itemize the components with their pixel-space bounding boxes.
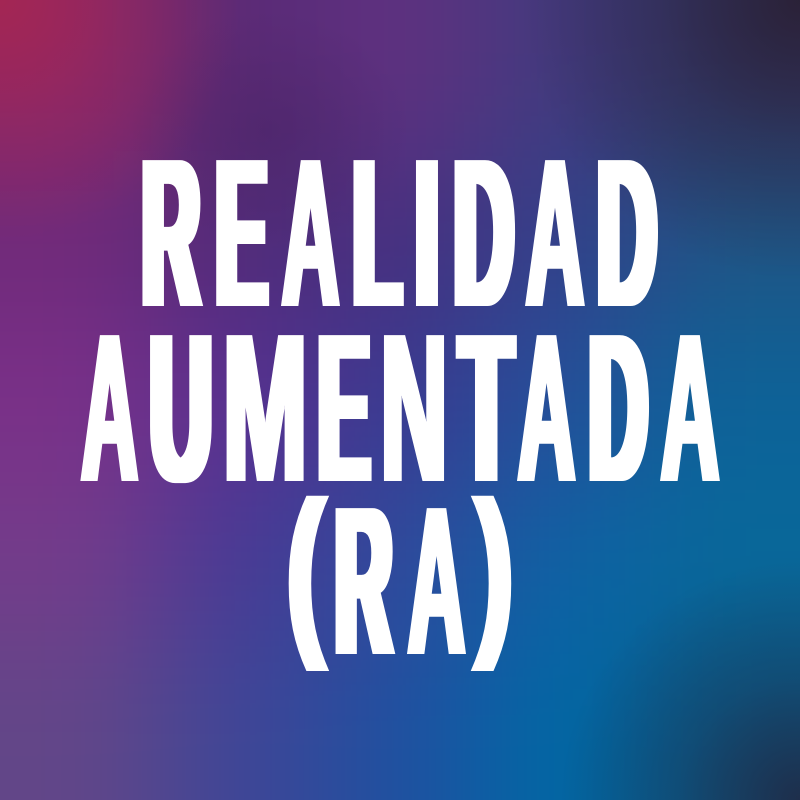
title line: REALIDAD: A [526, 114, 584, 351]
title line: REALIDAD: I [415, 115, 439, 352]
title line: AUMENTADA: A [81, 289, 138, 526]
title line: AUMENTADA: D [589, 289, 647, 526]
title line: AUMENTADA: U [150, 291, 212, 527]
title line: REALIDAD: L [353, 114, 401, 351]
title line: (RA) [286, 461, 514, 699]
title line: (RA): ) [474, 461, 514, 672]
title line: AUMENTADA [81, 289, 719, 527]
title line: AUMENTADA: A [661, 289, 719, 526]
title line: REALIDAD: E [216, 114, 267, 351]
title line: REALIDAD: D [598, 116, 656, 352]
title line: REALIDAD: D [454, 115, 514, 352]
title line: AUMENTADA: M [223, 291, 307, 527]
title line: AUMENTADA: A [518, 289, 575, 526]
title line: REALIDAD [142, 114, 656, 352]
title line: (RA): R [335, 462, 392, 699]
title line: REALIDAD: R [142, 114, 200, 351]
title line: (RA): A [408, 462, 465, 699]
title line: REALIDAD: A [282, 114, 339, 351]
title line: AUMENTADA: T [460, 290, 513, 527]
title line: AUMENTADA: N [381, 289, 447, 526]
title line: (RA): ( [286, 461, 326, 672]
title line: AUMENTADA: E [318, 290, 370, 526]
title [81, 114, 719, 699]
